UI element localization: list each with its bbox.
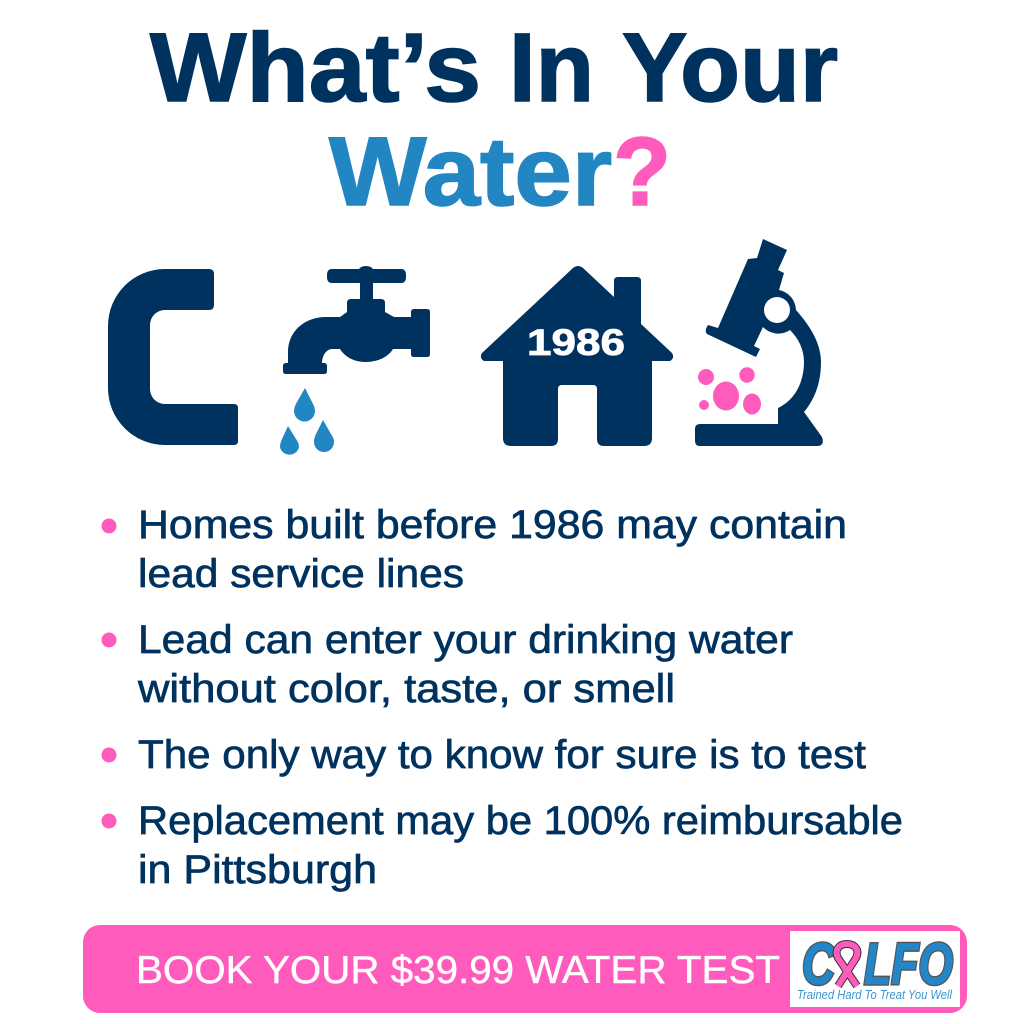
contaminant particles (698, 367, 761, 414)
bullet: test to know: The only way to know for sure is to test (138, 733, 866, 777)
bullet: lead service lines: Homes built before 1986 may contain (138, 503, 847, 547)
icon: house 1986 (481, 266, 673, 446)
bullet: lead is undetectable: Lead can enter your drinking water (138, 618, 793, 662)
call to action button (83, 925, 967, 1013)
icon: faucet with drops (280, 266, 430, 455)
house year label: 1986 (527, 322, 625, 363)
logo wordmark: LFO (864, 932, 953, 997)
title line: What's In Your: What’s (150, 13, 481, 122)
logo wordmark: C (802, 932, 836, 997)
bullet: reimbursement: Replacement may be 100% reimbursable (138, 799, 903, 843)
icon: microscope (695, 239, 823, 446)
logo tagline: Trained Hard To Treat You Well (797, 988, 953, 1002)
bullet: lead is undetectable (102, 618, 793, 711)
logo (790, 931, 960, 1007)
title line: Water?: Water (329, 117, 612, 226)
bullet: reimbursement: in Pittsburgh (138, 848, 377, 892)
microscope body (695, 239, 823, 446)
water drop (294, 388, 315, 422)
house silhouette (481, 266, 673, 446)
bullet: reimbursement (102, 799, 903, 892)
bullet list (102, 503, 903, 892)
title (150, 13, 838, 226)
title line: What's In Your (150, 13, 838, 122)
icon: pipe (108, 269, 238, 445)
bullet: lead service lines (102, 503, 847, 596)
logo wordmark: LFO (864, 932, 953, 997)
title line: What's In Your: In (509, 13, 594, 122)
logo background (790, 931, 960, 1007)
button label: BOOK YOUR $39.99 WATER TEST (136, 949, 780, 992)
bullet: lead service lines: lead service lines (138, 552, 464, 596)
button background (83, 925, 967, 1013)
title line: What's In Your: Your (622, 13, 838, 122)
water drop (314, 420, 334, 452)
faucet (283, 266, 430, 374)
bullet: lead is undetectable: without color, taste, or smell (137, 667, 675, 711)
logo wordmark (802, 932, 953, 997)
title line: Water?: ? (613, 117, 671, 226)
logo wordmark: C (802, 932, 836, 997)
water drop (280, 426, 299, 455)
icon: pink ribbon (837, 944, 857, 986)
